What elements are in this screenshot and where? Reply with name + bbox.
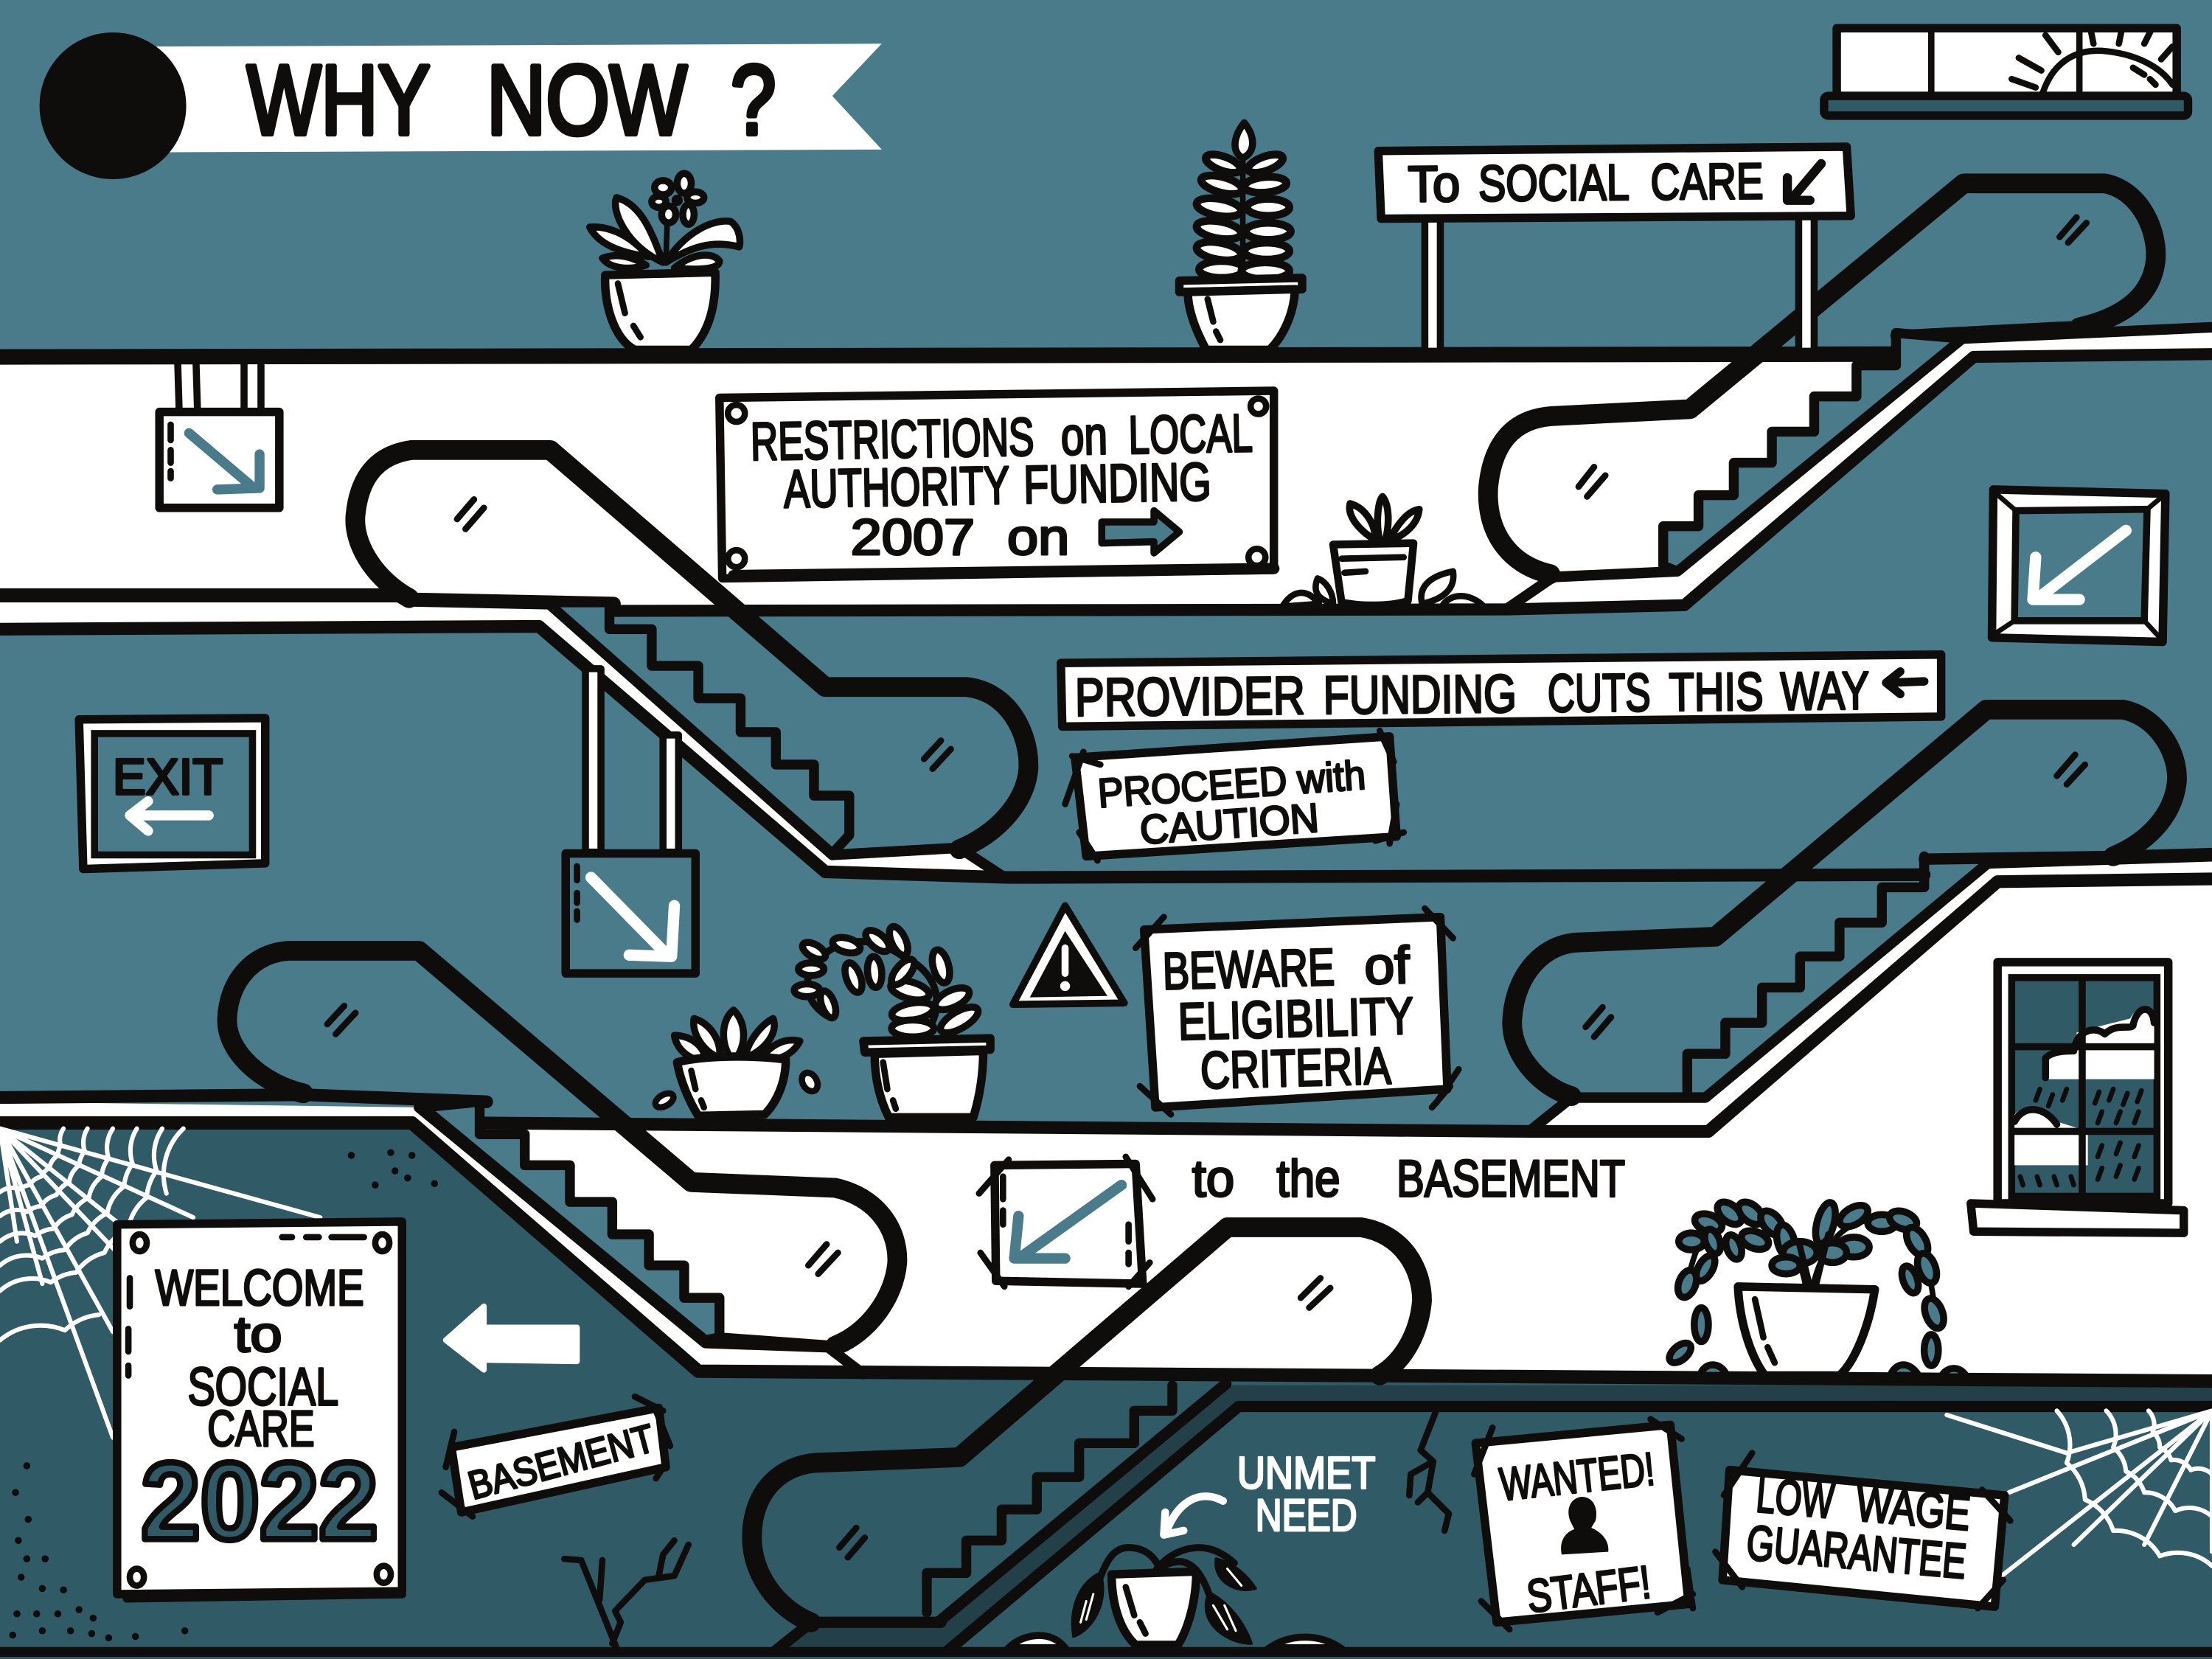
poster: welcome to social care 2022: 2022 [141,1439,378,1562]
title dot [40,32,187,179]
dead branch [564,1540,689,1648]
icon: person silhouette [1561,1497,1608,1554]
plant: trailing arch in pot [794,924,990,1117]
poster: welcome to social care 2022: SOCIAL [187,1357,338,1417]
window sill [1824,96,2188,116]
sign: beware of eligibility criteria: ELIGIBILITY [1178,987,1414,1051]
lower floor white wall [480,879,2212,1380]
escalator 1 top right [1488,184,2156,574]
plant: flower pot [590,173,740,349]
poster: welcome to social care 2022: WELCOME [155,1259,364,1316]
hanging sign: white arrow [566,669,695,973]
callout: unmet need: UNMET [1237,1447,1375,1498]
text: to the basement: the [1277,1150,1340,1208]
sign: wanted staff: STAFF! [1524,1557,1654,1623]
icon: curved arrow [1164,1496,1223,1535]
sign: provider funding cuts: WAY [1780,661,1869,721]
plaque: restrictions on local authority funding: 2007 [851,509,975,566]
plant: wilting in pot [1009,1548,1340,1648]
clouds [2045,1008,2154,1079]
sign: to social care: SOCIAL [1478,154,1630,212]
plaque: restrictions on local authority funding: on [1060,406,1108,467]
plaque: restrictions on local authority funding: AUTHORITY [783,456,1010,519]
sign: basement: BASEMENT [464,1416,659,1508]
sign: low wage guarantee: WAGE [1854,1476,1972,1541]
arrow sign: basement pointer [979,1157,1152,1287]
escalator 3 middle right [1512,709,2177,1096]
callout: unmet need: NEED [1256,1490,1357,1540]
sign: proceed with caution: PROCEED with [1096,752,1367,816]
basement dark rail strip [776,1385,2212,1651]
exit sign: EXIT [113,748,223,805]
plaque: restrictions on local authority funding: RESTRICTIONS [750,407,1034,472]
escalator 4 lower left [227,951,897,1346]
sign: provider funding cuts: THIS [1669,662,1764,723]
sign: beware of eligibility criteria: of [1363,936,1411,995]
window sill [1971,1203,2184,1233]
plaque: restrictions on local authority funding: FUNDING [1023,452,1211,515]
hanging sign: teal arrow [159,364,279,508]
sign: low wage guarantee: GUARANTEE [1745,1515,1969,1590]
plant: large trailing teal leaves [1666,1197,1966,1377]
icon: left arrow [1886,672,1924,694]
icon: arrow down-left [1787,164,1821,201]
sign: proceed with caution: CAUTION [1138,795,1321,853]
text: to the basement: BASEMENT [1397,1150,1625,1208]
sign: wanted staff: WANTED! [1498,1443,1657,1511]
title banner [40,32,882,179]
plant: succulent in bowl [653,1010,821,1116]
sign: wanted staff [1474,1419,1693,1630]
title text: ? [731,46,776,156]
left upper rail strip [0,598,1004,877]
plaque screws [728,398,1266,567]
speckle dots [13,1152,434,1638]
sign: to social care [1378,147,1851,351]
escalator 2 upper left [355,450,1029,854]
title text: WHY [247,46,431,156]
sign: beware of eligibility criteria: CRITERIA [1200,1037,1392,1100]
sign: low wage guarantee [1716,1453,2010,1608]
title text [247,46,776,156]
crack in wall [1409,1411,1449,1531]
plant: tall fern [1179,122,1302,349]
icon: white left arrow [130,801,209,831]
basement background [0,1123,2212,1659]
cobweb top left [0,1129,320,1438]
plaque: restrictions on local authority funding: LOCAL [1128,403,1253,465]
floor and rail lines [0,326,2212,1652]
cobweb bottom right [1947,1411,2212,1576]
sign: to social care: CARE [1650,153,1764,211]
plaque: restrictions on local authority funding: on [1007,509,1069,566]
title text: NOW [487,46,687,156]
sign: proceed with caution [1065,731,1404,860]
warning triangle [1013,905,1124,1004]
framed arrow sign right [1992,490,2166,642]
sign: to social care: To [1408,156,1461,212]
icon: right arrow [1102,511,1179,553]
poster: welcome to social care 2022: to [234,1306,282,1363]
sign: beware of eligibility criteria: BEWARE [1162,939,1335,1001]
sign: provider funding cuts: CUTS [1548,663,1651,723]
sign: provider funding cuts: FUNDING [1323,664,1517,726]
right middle rail strip [1529,856,2212,1131]
poster: welcome to social care 2022 [117,1222,402,1599]
sign: low wage guarantee: LOW [1754,1467,1836,1529]
poster: welcome to social care 2022: CARE [207,1400,315,1457]
poster screws [130,1234,391,1586]
top floor white wall [0,352,1896,610]
big white arrow [446,1307,577,1370]
escalator 5 to basement [752,1228,1422,1622]
plaque: restrictions on local authority funding [720,391,1274,578]
lower window with rain [1971,962,2184,1233]
sign: provider funding cuts: PROVIDER [1075,666,1305,728]
sign: beware of eligibility criteria [1135,908,1458,1114]
sign: provider funding cuts [1061,655,1941,728]
left lower rail strip [0,1102,863,1374]
exit sign [79,718,265,869]
plant: small pot with leaves [1282,496,1484,607]
text: to the basement: to [1192,1150,1234,1208]
text: to the basement [1192,1150,1625,1208]
top window with sun [1824,28,2188,116]
callout: unmet need [1164,1447,1375,1540]
right top rail strip [1508,327,2212,608]
